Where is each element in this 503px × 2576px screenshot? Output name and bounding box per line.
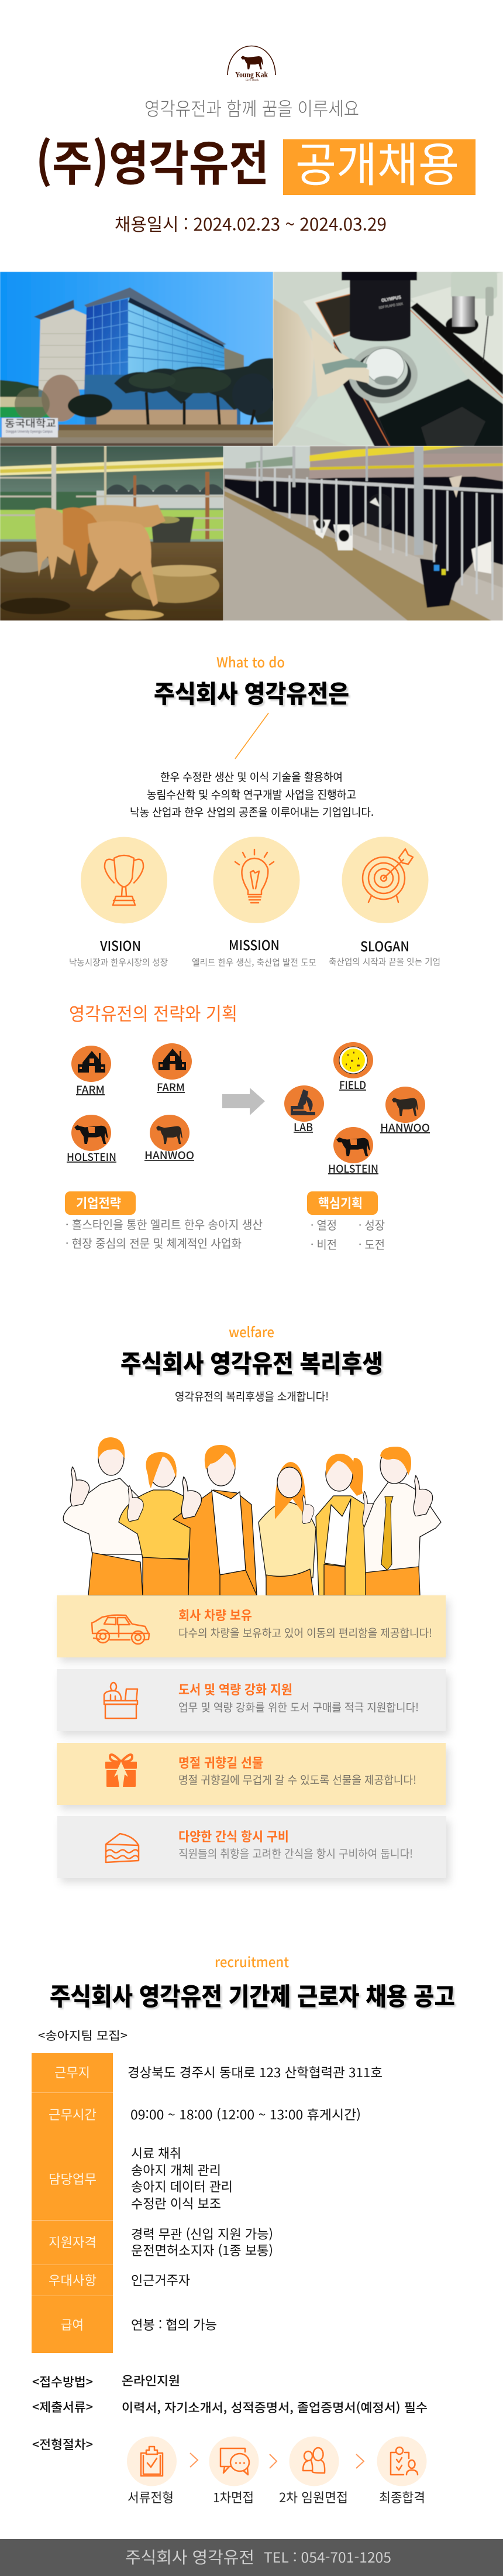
node: farm 1 (71, 1046, 111, 1097)
core values: · 성장 (359, 1216, 385, 1233)
title badge: open recruitment: 공개채용 (295, 128, 459, 196)
mission column (192, 837, 316, 968)
strategy heading: 영각유전의 전략와 기획 (69, 999, 237, 1026)
strategy bullets: · 현장 중심의 전문 및 체계적인 사업화 (66, 1234, 242, 1251)
section: what to do (130, 651, 374, 820)
required documents: 이력서, 자기소개서, 성적증명서, 졸업증명서(예정서) 필수 (122, 2399, 428, 2416)
badge: corporate strategy (65, 1191, 136, 1215)
application info (32, 2372, 428, 2453)
table values: 연봉 : 협의 가능 (131, 2315, 217, 2334)
step 1: document screening: 서류전형 (128, 2488, 174, 2506)
core values: · 열정 (311, 1216, 337, 1233)
table label column: 담당업무 (49, 2169, 97, 2188)
vision column (69, 837, 168, 968)
tagline: 영각유전과 함께 꿈을 이루세요 (144, 94, 359, 121)
intro text: 한우 수정란 생산 및 이식 기술을 활용하여 (160, 769, 343, 785)
icon: trophy (81, 837, 167, 924)
title: company name: (주)영각유전 (36, 125, 269, 194)
intro text: 농림수산학 및 수의학 연구개발 사업을 진행하고 (147, 786, 356, 802)
step 3: executive interview: 2차 임원면접 (279, 2488, 348, 2506)
person 3 (173, 1445, 257, 1595)
recruitment dates: 채용일시 : 2024.02.23 ~ 2024.03.29 (115, 210, 387, 236)
table values: 경상북도 경주시 동대로 123 산학협력관 311호 (128, 2063, 383, 2081)
node: farm 2 (152, 1043, 192, 1095)
table values: 송아지 개체 관리 (131, 2160, 221, 2179)
table values: 송아지 데이터 관리 (131, 2177, 233, 2195)
footer (0, 2539, 503, 2576)
person 4 (259, 1462, 316, 1595)
illustration: six employees with thumbs up (63, 1437, 441, 1595)
node: field: FIELD (339, 1077, 366, 1092)
node: lab: LAB (294, 1119, 313, 1135)
welfare card 4: snacks (57, 1816, 446, 1878)
table values (128, 2063, 383, 2334)
table values: 09:00 ~ 18:00 (12:00 ~ 13:00 휴게시간) (130, 2105, 361, 2123)
section subtitle: 영각유전의 복리후생을 소개합니다! (175, 1388, 329, 1404)
slogan column (329, 837, 440, 968)
icon: cake slice (106, 1834, 139, 1862)
vision caption: 낙농시장과 한우시장의 성장 (69, 956, 168, 968)
logo: Young Kak: Live Stock (246, 79, 259, 82)
phone: TEL : 054-701-1205 (264, 2546, 391, 2567)
photo: university building (0, 272, 274, 446)
strategy diagram (67, 1042, 430, 1176)
photo: university building: Dongguk University Gyeongju Campus (6, 430, 53, 434)
icon: target (342, 837, 428, 923)
recruitment table (32, 2053, 383, 2353)
table label column: 급여 (61, 2315, 84, 2334)
person 5 (316, 1454, 385, 1595)
node: holstein right: HOLSTEIN (328, 1161, 378, 1176)
core planning list (307, 1191, 385, 1252)
photo: university building: 동국대학교 (5, 415, 56, 430)
node: holstein left (67, 1115, 116, 1164)
section: welfare (120, 1321, 383, 1404)
icon: light bulb (213, 837, 299, 923)
mission caption: 엘리트 한우 생산, 축산업 발전 도모 (192, 956, 316, 968)
step 2: first interview (209, 2437, 259, 2506)
step 2: first interview: 1차면접 (213, 2488, 254, 2506)
intro text: 낙농 산업과 한우 산업의 공존을 이루어내는 기업입니다. (130, 804, 374, 820)
application method: <접수방법> (32, 2373, 93, 2390)
header block (36, 46, 476, 236)
card title: 다양한 간식 항시 구비 (178, 1827, 289, 1845)
node: holstein right (328, 1127, 378, 1176)
node: farm 1: FARM (76, 1082, 105, 1097)
photo: holstein dairy barn (223, 446, 503, 621)
icon: car (92, 1615, 149, 1644)
table label column: 지원자격 (49, 2232, 97, 2251)
slogan label: SLOGAN (360, 936, 409, 955)
badge: core planning: 핵심기획 (318, 1193, 363, 1212)
application method (32, 2372, 180, 2390)
table label column: 근무시간 (49, 2105, 97, 2123)
step 3: executive interview (279, 2437, 348, 2506)
node: farm 2: FARM (157, 1080, 185, 1095)
photo: microscope lab (273, 272, 503, 446)
table label column: 근무지 (54, 2063, 90, 2081)
required documents: <제출서류> (32, 2398, 93, 2416)
section kicker: What to do (216, 651, 285, 672)
team name: <송아지팀 모집> (38, 2026, 128, 2043)
strategy list (65, 1191, 263, 1251)
mission label: MISSION (229, 934, 280, 954)
section heading: 주식회사 영각유전은 (154, 674, 349, 710)
table values: 운전면허소지자 (1종 보통) (131, 2241, 273, 2259)
badge: corporate strategy: 기업전략 (76, 1193, 121, 1212)
core values (311, 1216, 385, 1252)
logo: Young Kak: Young Kak (235, 71, 268, 80)
icon: person at desk (104, 1683, 137, 1718)
core values: · 도전 (359, 1235, 385, 1252)
logo: Young Kak (228, 46, 275, 82)
core values: · 비전 (311, 1235, 337, 1252)
card title: 회사 차량 보유 (178, 1605, 252, 1624)
section kicker: welfare (229, 1321, 274, 1341)
node: field (333, 1042, 373, 1092)
person 1 (63, 1437, 144, 1595)
node: holstein left: HOLSTEIN (67, 1149, 116, 1164)
welfare card 1: company vehicles (57, 1595, 446, 1657)
section kicker: recruitment (215, 1951, 289, 1971)
card description: 직원들의 취향을 고려한 간식을 항시 구비하여 둡니다! (178, 1845, 413, 1861)
node: hanwoo right (380, 1087, 430, 1135)
step 1: document screening (127, 2437, 177, 2506)
section heading: 주식회사 영각유전 기간제 근로자 채용 공고 (50, 1977, 455, 2013)
table values: 수정란 이식 보조 (131, 2194, 221, 2212)
node: hanwoo right: HANWOO (380, 1120, 430, 1135)
section heading: 주식회사 영각유전 복리후생 (120, 1344, 383, 1380)
table label column (32, 2053, 113, 2353)
node: lab (284, 1085, 324, 1135)
vision label: VISION (99, 935, 141, 955)
card title: 도서 및 역량 강화 지원 (178, 1680, 292, 1698)
person 6 (364, 1447, 441, 1595)
selection process (127, 2437, 427, 2506)
photo: microscope lab: SDF PLAPO 100X (378, 303, 404, 310)
table label column: 우대사항 (49, 2270, 97, 2289)
node: hanwoo left: HANWOO (144, 1147, 194, 1163)
chevron 2 (270, 2454, 277, 2468)
welfare card 3: holiday gifts (57, 1743, 446, 1805)
table values: 경력 무관 (신입 지원 가능) (131, 2224, 273, 2243)
step 4: final acceptance (377, 2437, 427, 2506)
slogan caption: 축산업의 시작과 끝을 잇는 기업 (329, 955, 440, 968)
photo: microscope lab: OLYMPUS (381, 294, 402, 303)
arrow (222, 1088, 265, 1115)
section: recruitment (38, 1951, 455, 2043)
card description: 명절 귀향길에 무겁게 갈 수 있도록 선물을 제공합니다! (178, 1772, 416, 1787)
intro text (130, 769, 374, 820)
card description: 다수의 차량을 보유하고 있어 이동의 편리함을 제공합니다! (178, 1625, 432, 1640)
application method: 온라인지원 (122, 2372, 180, 2389)
welfare card 2: books and training (57, 1669, 446, 1731)
chevron 3 (356, 2454, 364, 2468)
strategy bullets: · 홀스타인을 통한 엘리트 한우 송아지 생산 (66, 1215, 263, 1232)
chevron 1 (190, 2453, 198, 2467)
company name: 주식회사 영각유전 (125, 2545, 254, 2568)
photo: calves in barn (0, 446, 223, 621)
step 4: final acceptance: 최종합격 (379, 2488, 425, 2506)
node: hanwoo left (144, 1115, 194, 1163)
selection process label: <전형절차> (32, 2435, 93, 2453)
table values: 인근거주자 (131, 2270, 190, 2289)
icon: gift box (105, 1755, 137, 1787)
table values: 시료 채취 (131, 2143, 181, 2162)
strategy bullets (66, 1215, 263, 1251)
card description: 업무 및 역량 강화를 위한 도서 구매를 적극 지원합니다! (178, 1699, 419, 1715)
person 2 (119, 1452, 193, 1595)
card title: 명절 귀향길 선물 (178, 1753, 263, 1772)
diagonal accent line (235, 713, 268, 759)
